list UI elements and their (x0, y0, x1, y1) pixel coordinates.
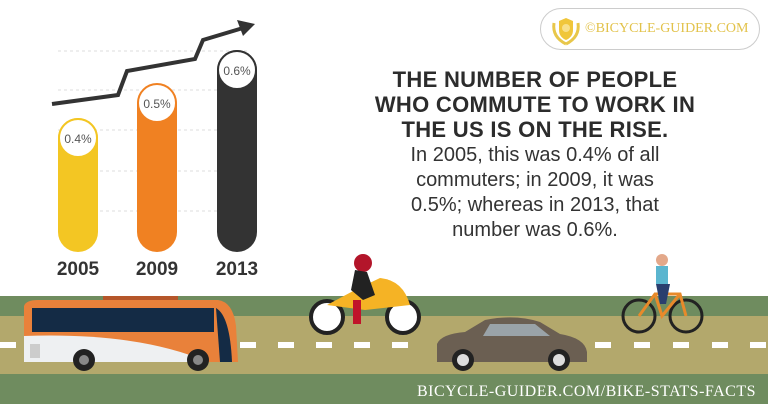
logo badge (540, 8, 760, 50)
heading: WHO COMMUTE TO WORK IN (375, 92, 695, 117)
icon: gold shield (552, 18, 580, 46)
bar 2013 (217, 50, 257, 252)
footer url: BICYCLE-GUIDER.COM/BIKE-STATS-FACTS (417, 383, 756, 400)
bar 2009 (137, 84, 177, 252)
heading: THE US IS ON THE RISE. (402, 117, 668, 142)
body text: number was 0.6%. (452, 219, 618, 241)
illustration: car (437, 317, 587, 371)
road scene (0, 296, 768, 404)
year labels: 2005 (57, 259, 100, 280)
body text: 0.5%; whereas in 2013, that (411, 194, 659, 216)
logo text: ©BICYCLE-GUIDER.COM (585, 21, 748, 36)
year labels (57, 259, 258, 280)
bar 2009: 0.5% (143, 97, 171, 111)
body text (410, 144, 660, 241)
body text: commuters; in 2009, it was (416, 169, 654, 191)
bar 2005: 0.4% (64, 132, 92, 146)
bar chart (52, 20, 258, 280)
bar 2005 (58, 118, 98, 252)
illustration: bus (24, 296, 238, 371)
heading: THE NUMBER OF PEOPLE (393, 67, 677, 92)
illustration: motorcycle (309, 254, 421, 335)
year labels: 2009 (136, 259, 178, 280)
heading (374, 67, 695, 142)
arrow: rising trend (52, 20, 255, 104)
year labels: 2013 (216, 259, 258, 280)
body text: In 2005, this was 0.4% of all (410, 144, 660, 166)
bar 2013: 0.6% (223, 64, 251, 78)
illustration: bicycle (622, 254, 704, 334)
